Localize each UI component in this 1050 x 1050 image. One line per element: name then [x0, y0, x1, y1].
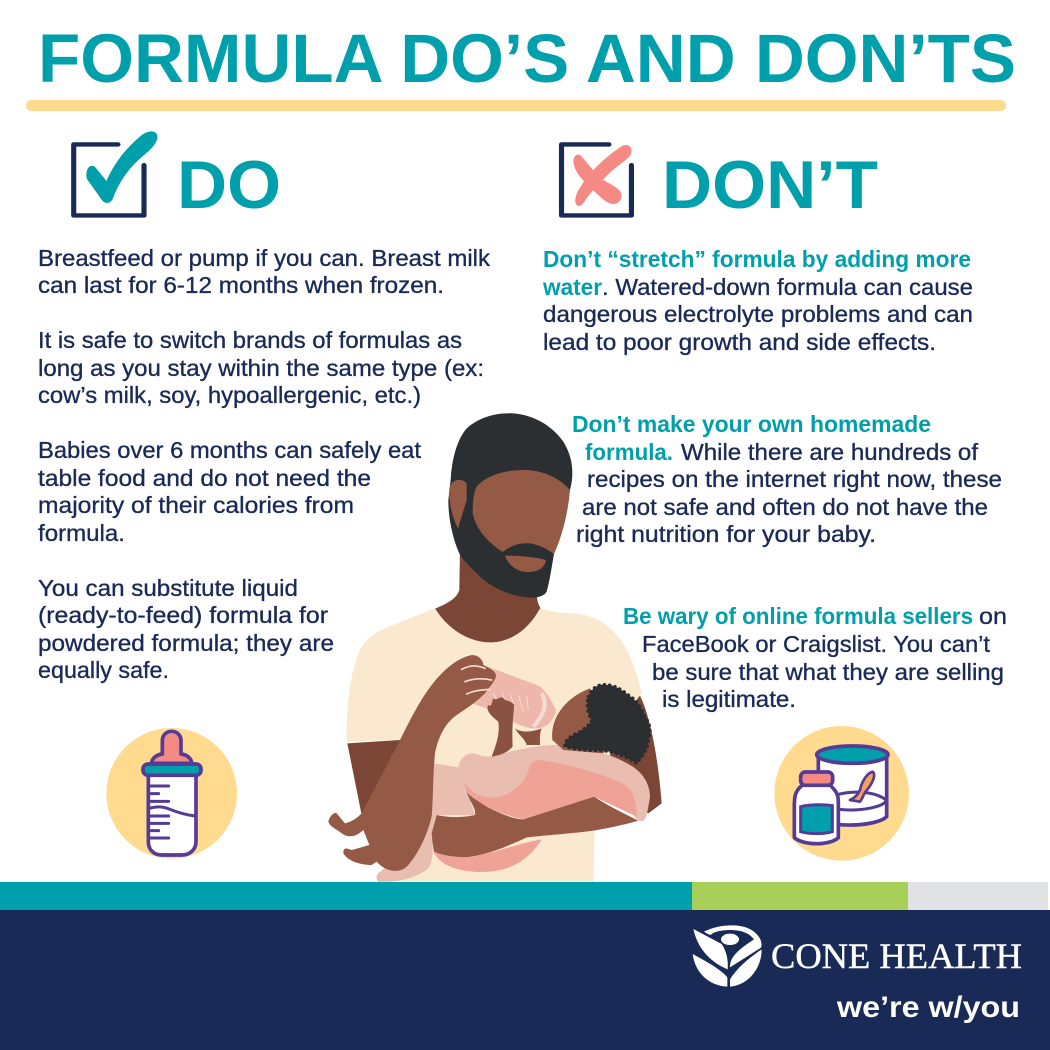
do item: liquid formula: (ready-to-feed) formula for [38, 602, 328, 628]
don't item: stretch [542, 246, 973, 355]
father's neck [433, 547, 541, 647]
do item: table food: majority of their calories from [38, 492, 354, 518]
don't item: online sellers: is legitimate. [662, 686, 796, 712]
text block: do list [38, 245, 491, 683]
don't item: stretch: . Watered-down formula can cause [602, 274, 973, 300]
baby bottle [467, 665, 556, 728]
father's face [473, 470, 570, 554]
do item: table food: table food and do not need the [38, 465, 371, 491]
don't item: online sellers [623, 603, 1007, 712]
don't item: homemade: are not safe and often do not have the [582, 494, 988, 520]
icon: x mark box [562, 144, 632, 215]
do item: table food [38, 437, 422, 546]
blanket light [377, 745, 650, 882]
logo: Cone Health mark [693, 925, 762, 987]
don't item: stretch: dangerous electrolyte problems and can [543, 301, 973, 327]
father's upper arm shadow [347, 740, 400, 815]
do item: switch brands: long as you stay within the same type (ex: [38, 355, 484, 381]
father's ear [449, 480, 467, 528]
baby's head [552, 688, 613, 753]
don't item: homemade: recipes on the internet right now, these [587, 466, 1002, 492]
illustration: father feeding baby [328, 413, 662, 882]
do item: breastfeed [38, 245, 491, 298]
baby's hair [565, 685, 650, 763]
do item: liquid formula: equally safe. [38, 657, 169, 683]
do item: table food: Babies over 6 months can safely eat [38, 437, 422, 463]
do item: switch brands [38, 327, 484, 408]
blanket dark [463, 760, 637, 819]
father's t-shirt [347, 608, 642, 882]
father's far arm [573, 690, 662, 813]
don't item: online sellers: Be wary of online formula sellers [623, 603, 973, 629]
finger highlights [462, 666, 492, 694]
title: FORMULA DO’S AND DON’TS [38, 20, 1016, 97]
don't item: stretch: water [542, 274, 602, 300]
do item: table food: formula. [38, 520, 125, 546]
don't item: stretch: lead to poor growth and side effects. [543, 329, 936, 355]
don't item: homemade: While there are hundreds of [681, 439, 979, 465]
father's cradling hand and forearm [423, 792, 638, 857]
do item: switch brands: It is safe to switch brands of formulas as [38, 327, 462, 353]
father's hair and beard [448, 413, 572, 598]
heading: DO: DO [177, 147, 281, 223]
icon: formula can and bottle [774, 726, 909, 861]
don't item: homemade: right nutrition for your baby. [576, 521, 876, 547]
do item: breastfeed: Breastfeed or pump if you can. Breast milk [38, 245, 491, 271]
baby's hands [487, 697, 542, 757]
don't item: stretch: Don’t “stretch” formula by adding more [543, 246, 971, 272]
don't item: homemade: formula. [585, 439, 673, 465]
logo: Cone Health wordmark: CONE HEALTH [771, 936, 1022, 976]
blanket lower fold [433, 839, 542, 872]
text block: don't list [542, 246, 1007, 712]
footer band [0, 910, 1050, 1050]
father's mouth [505, 556, 546, 572]
title underline bar [26, 100, 1006, 111]
do item: liquid formula: You can substitute liquid [38, 575, 298, 601]
do item: liquid formula: powdered formula; they are [38, 630, 334, 656]
do item: switch brands: cow’s milk, soy, hypoallergenic, etc.) [38, 382, 421, 408]
do item: breastfeed: can last for 6-12 months when frozen. [38, 272, 444, 298]
do item: liquid formula [38, 575, 334, 683]
don't item: homemade [572, 411, 1002, 547]
footer color strip [0, 882, 1048, 910]
icon: check mark box [74, 131, 157, 215]
don't item: homemade: Don’t make your own homemade [572, 411, 931, 437]
heading: DON'T: DON’T [662, 147, 878, 223]
don't item: online sellers: on [979, 603, 1007, 629]
father's bottle arm and baby's feet [328, 655, 496, 871]
don't item: online sellers: be sure that what they are selling [652, 659, 1004, 685]
icon: baby bottle [106, 728, 237, 859]
tagline: we’re w/you [836, 991, 1020, 1024]
don't item: online sellers: FaceBook or Craigslist. You can’t [642, 631, 991, 657]
